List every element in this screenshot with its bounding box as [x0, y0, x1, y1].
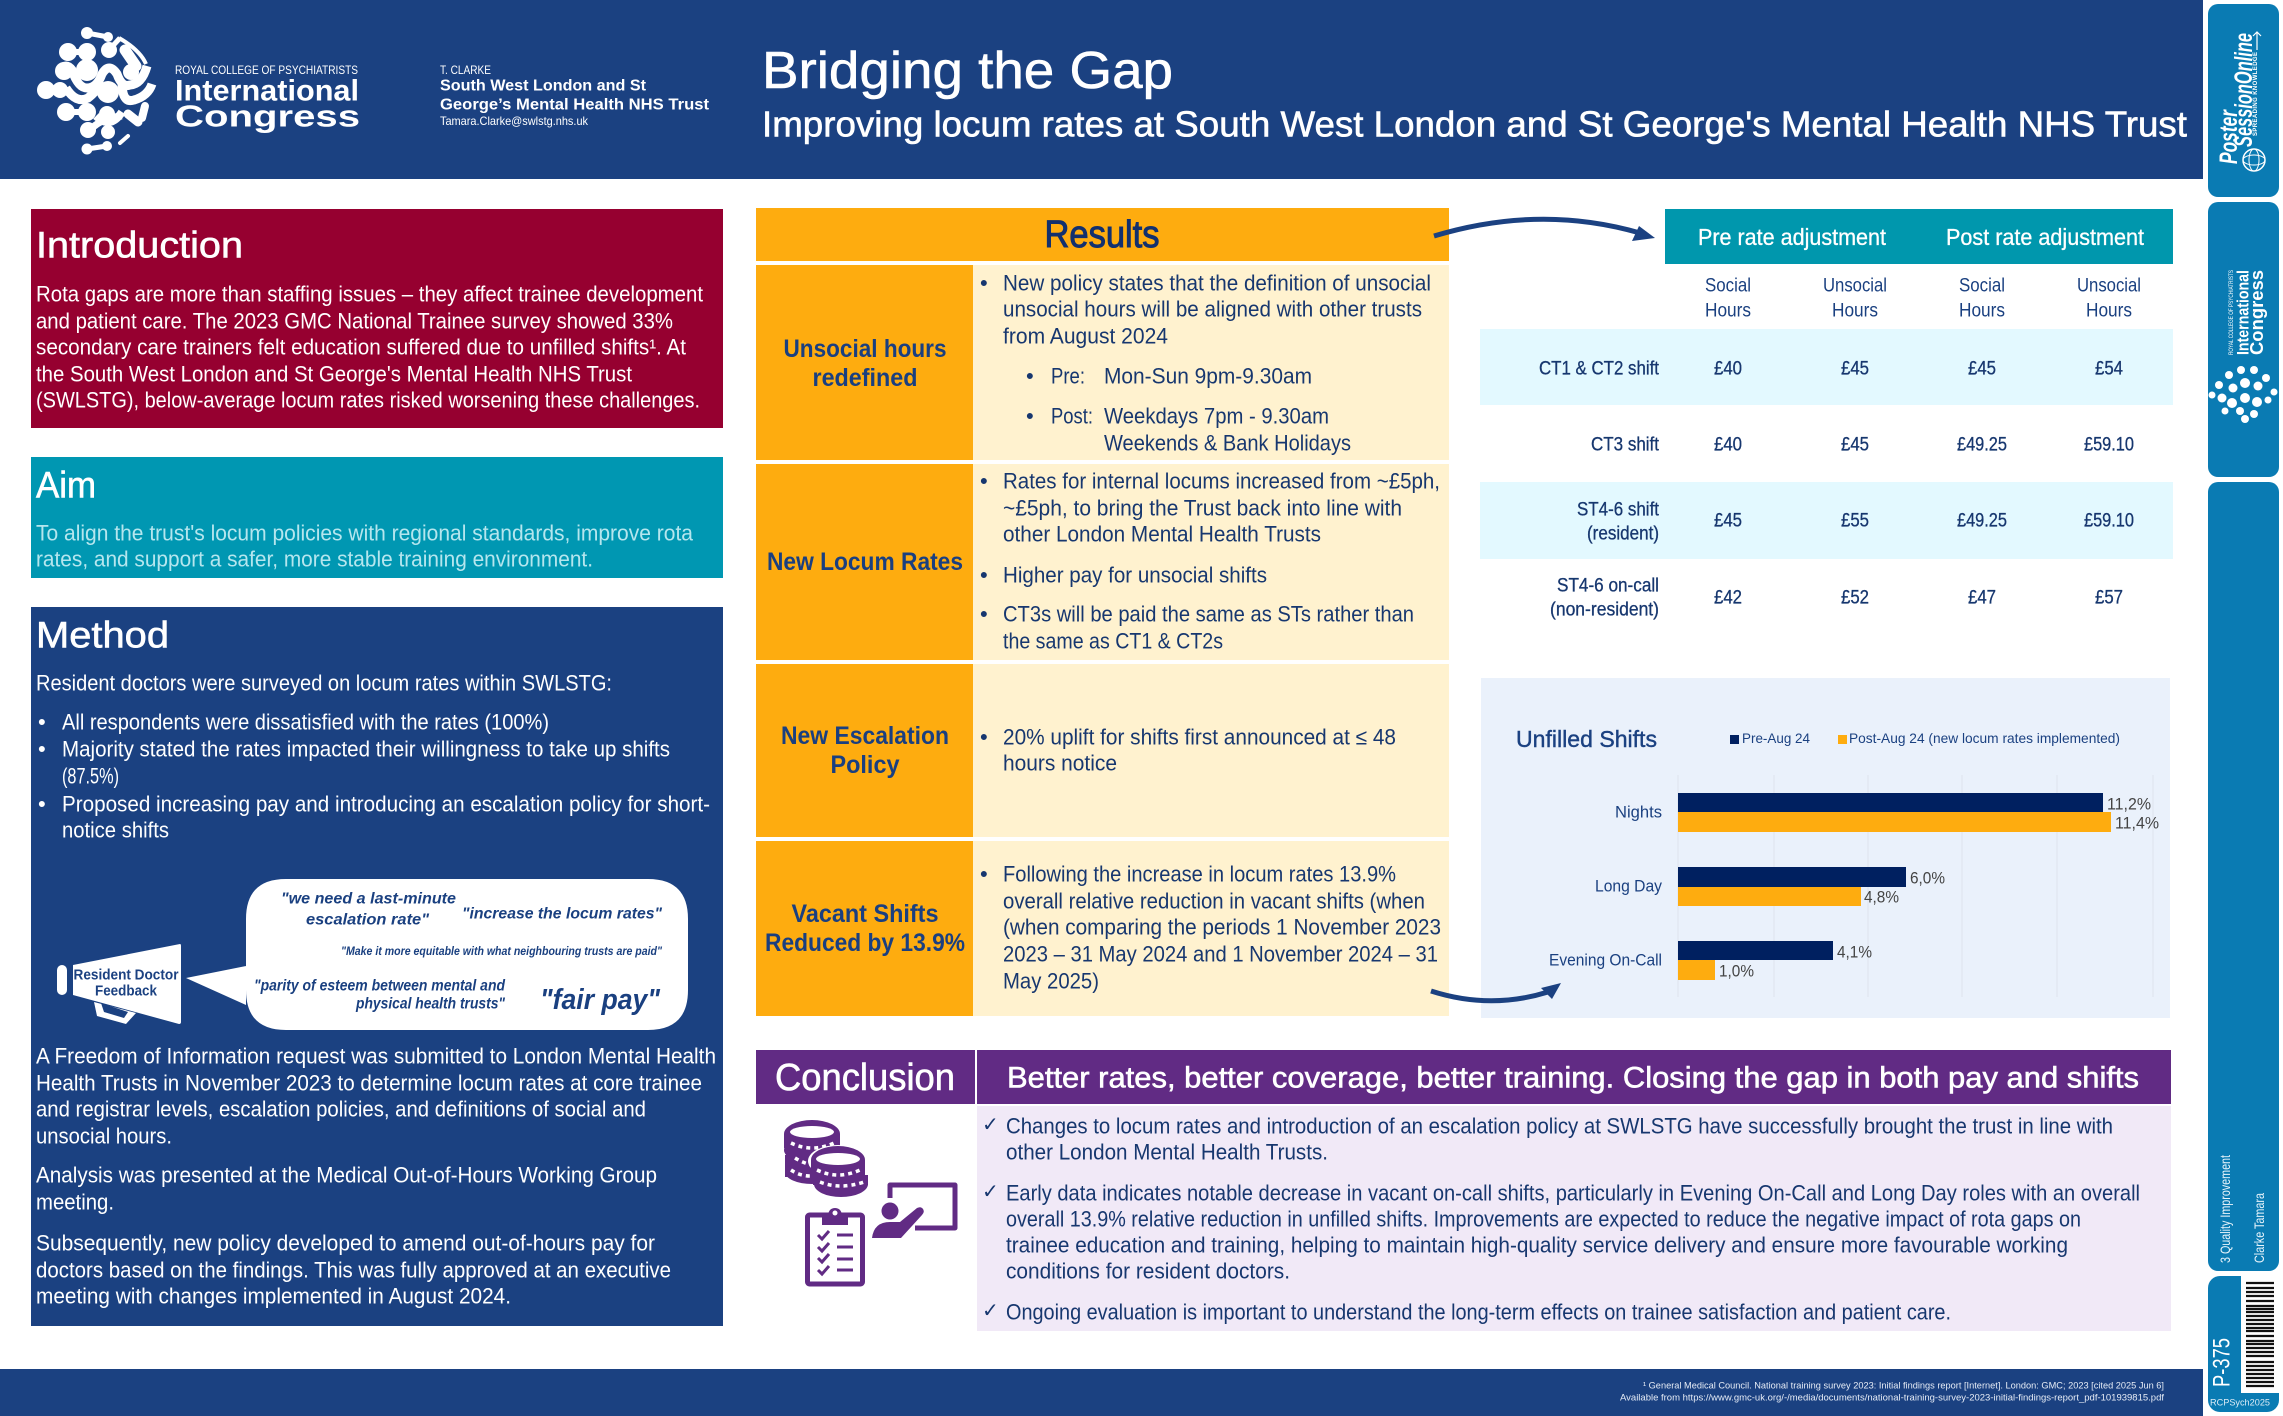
conclusion text block: [977, 1106, 2171, 1331]
speech bubble with quotes: "parity of esteem between mental and: [254, 978, 506, 994]
author block: South West London and St: [440, 78, 647, 94]
row: vacant shifts reduced: 2023 – 31 May 2024 and 1 November 2024 – 31: [1003, 942, 1438, 966]
icon: presenter at board: [872, 1185, 955, 1238]
heading: introduction: Introduction: [36, 224, 243, 266]
row: unsocial hours redefined: unsocial hours will be aligned with other trusts: [1003, 296, 1422, 322]
row: ST4-6 shift: £59.10: [2084, 510, 2134, 532]
column headings: Unsocial: [1823, 276, 1887, 296]
row: CT3: £59.10: [2084, 434, 2134, 456]
author block: George’s Mental Health NHS Trust: [440, 96, 710, 114]
row: ST4-6 shift: £45: [1714, 510, 1742, 532]
method process text: and registrar levels, escalation policies, and definitions of social and: [36, 1096, 646, 1122]
row: new locum rates: Higher pay for unsocial shifts: [1003, 562, 1267, 588]
column headings: Hours: [2086, 300, 2132, 322]
method process text: Health Trusts in November 2023 to determine locum rates at core trainee: [36, 1070, 702, 1096]
row: new escalation policy: Policy: [830, 751, 900, 779]
row: unsocial hours redefined: Unsocial hours: [784, 335, 946, 363]
row: CT3: [1591, 434, 2134, 456]
icon: megaphone with resident doctor feedback: Resident Doctor: [74, 966, 179, 984]
chart legend: Pre-Aug 24: [1742, 730, 1810, 746]
row: vacant shifts reduced: overall relative reduction in vacant shifts (when: [1003, 888, 1425, 914]
row: vacant shifts reduced: Vacant Shifts: [792, 900, 938, 928]
logo wordmark: ROYAL COLLEGE OF PSYCHIATRISTS: [175, 63, 358, 77]
conclusion text block: ✓: [982, 1298, 999, 1322]
row: CT3: £40: [1714, 434, 1742, 456]
method process text: meeting.: [36, 1190, 114, 1214]
logo wordmark: International: [175, 74, 359, 108]
row: CT1 and CT2: CT1 & CT2 shift: [1539, 358, 1660, 380]
sidebar: international congress: ROYAL COLLEGE OF PSYCHIATRISTS: [2229, 270, 2235, 355]
logo wordmark: [175, 63, 360, 134]
aim text: rates, and support a safer, more stable training environment.: [36, 546, 593, 572]
bars: long day: 4,8%: [1864, 888, 1899, 906]
bars: evening on-call: [1549, 941, 1872, 980]
bars: nights: Nights: [1615, 802, 1662, 822]
row: ST4-6 on-call: £42: [1714, 588, 1742, 608]
sidebar: international congress: [2208, 202, 2279, 477]
row: ST4-6 on-call: ST4-6 on-call: [1557, 576, 1659, 596]
row: new locum rates: •: [980, 468, 988, 494]
sidebar: international congress: Congress: [2247, 270, 2267, 355]
arrow: results to table: [1434, 219, 1655, 241]
row: new locum rates: New Locum Rates: [767, 548, 963, 576]
header band: [0, 0, 2203, 179]
row: new locum rates: CT3s will be paid the same as STs rather than: [1003, 602, 1414, 626]
conclusion text block: Changes to locum rates and introduction of an escalation policy at SWLSTG have successfully brought the trust in line with: [1006, 1114, 2113, 1138]
row: ST4-6 on-call: £57: [2095, 588, 2123, 608]
bars: long day: [1595, 867, 1945, 906]
row: unsocial hours redefined: New policy states that the definition of unsocial: [1003, 270, 1431, 296]
row: new escalation policy: •: [980, 724, 988, 750]
row: ST4-6 on-call: £47: [1968, 588, 1996, 608]
survey text: Majority stated the rates impacted their willingness to take up shifts: [62, 736, 670, 762]
conclusion heading: Conclusion: [775, 1057, 955, 1099]
conclusion text block: trainee education and training, helping to maintain high-quality service delivery and ensure more favourable working: [1006, 1232, 2068, 1258]
results heading bar: Results: [1044, 214, 1160, 256]
row: new locum rates: •: [980, 602, 988, 626]
subtitle: Improving locum rates at South West London and St George's Mental Health NHS Trust: [762, 104, 2187, 144]
icon: congress logo: [37, 27, 152, 154]
conclusion text block: other London Mental Health Trusts.: [1006, 1140, 1328, 1164]
row: CT3: £49.25: [1957, 434, 2007, 456]
bars: long day: 6,0%: [1910, 868, 1945, 888]
survey text: •: [38, 736, 46, 762]
row: unsocial hours redefined: •: [1026, 404, 1034, 428]
column headings: [1705, 276, 2141, 322]
conclusion text block: overall 13.9% relative reduction in unfilled shifts. Improvements are expected to reduce the negative impact of rota gaps on: [1006, 1206, 2081, 1232]
icon: coins: [784, 1120, 868, 1197]
bars: evening on-call: 4,1%: [1837, 942, 1872, 962]
introduction text: Rota gaps are more than staffing issues – they affect trainee development: [36, 282, 703, 306]
row: CT3: CT3 shift: [1591, 434, 1660, 456]
chart: unfilled shifts: [1481, 678, 2170, 1018]
row: new locum rates: the same as CT1 & CT2s: [1003, 628, 1223, 654]
sidebar: category and author: Clarke Tamara: [2251, 1193, 2267, 1263]
chart legend: [1730, 730, 2120, 746]
aim text: [36, 520, 694, 572]
row: new escalation policy: 20% uplift for shifts first announced at ≤ 48: [1003, 724, 1396, 750]
row: CT1 and CT2: [1480, 329, 2173, 405]
bars: evening on-call: 1,0%: [1719, 962, 1754, 980]
column headings: Unsocial: [2077, 276, 2141, 296]
row: unsocial hours redefined: redefined: [812, 364, 918, 392]
table: locum rates: [1480, 209, 2173, 620]
introduction text: the South West London and St George's Mental Health NHS Trust: [36, 362, 632, 386]
method process text: Analysis was presented at the Medical Out-of-Hours Working Group: [36, 1162, 657, 1188]
row: unsocial hours redefined: Weekdays 7pm - 9.30am: [1104, 404, 1329, 428]
row: unsocial hours redefined: •: [1026, 364, 1034, 388]
row: unsocial hours redefined: Weekends & Bank Holidays: [1104, 430, 1351, 456]
row: vacant shifts reduced: Following the increase in locum rates 13.9%: [1003, 862, 1396, 886]
row: new locum rates: Rates for internal locums increased from ~£5ph,: [1003, 468, 1440, 494]
method process text: doctors based on the findings. This was fully approved at an executive: [36, 1258, 671, 1282]
row: ST4-6 shift: £49.25: [1957, 510, 2007, 532]
row: CT3: £45: [1841, 434, 1869, 456]
row: CT1 and CT2: £40: [1714, 358, 1742, 380]
introduction text: [36, 282, 703, 412]
row: CT1 and CT2: £54: [2095, 358, 2123, 380]
survey text: •: [38, 710, 46, 734]
row: vacant shifts reduced: May 2025): [1003, 968, 1099, 994]
conclusion text block: conditions for resident doctors.: [1006, 1258, 1290, 1284]
row: vacant shifts reduced: [756, 841, 1449, 1016]
table header: Post rate adjustment: [1946, 224, 2145, 250]
row: vacant shifts reduced: Reduced by 13.9%: [765, 929, 965, 957]
method process text: [36, 1044, 716, 1308]
row: unsocial hours redefined: [756, 265, 1449, 460]
author block: [440, 63, 710, 128]
row: new locum rates: ~£5ph, to bring the Trust back into line with: [1003, 496, 1402, 520]
speech bubble with quotes: escalation rate": [306, 912, 429, 928]
row: unsocial hours redefined: •: [980, 270, 988, 296]
sidebar: poster session online: [2208, 4, 2279, 197]
survey text: Resident doctors were surveyed on locum rates within SWLSTG:: [36, 670, 612, 696]
row: unsocial hours redefined: from August 2024: [1003, 324, 1168, 348]
panel: conclusion: [756, 1050, 2171, 1331]
panel: results: [756, 208, 1449, 1016]
survey text: notice shifts: [62, 818, 169, 842]
method process text: A Freedom of Information request was submitted to London Mental Health: [36, 1044, 716, 1068]
survey text: (87.5%): [62, 764, 119, 788]
row: ST4-6 shift: £55: [1841, 510, 1869, 532]
survey text: All respondents were dissatisfied with the rates (100%): [62, 710, 549, 734]
survey text: Proposed increasing pay and introducing an escalation policy for short-: [62, 792, 710, 816]
row: ST4-6 on-call: £52: [1841, 588, 1869, 608]
conclusion text block: ✓: [982, 1179, 999, 1203]
sidebar: [2208, 4, 2279, 1412]
conclusion heading: [756, 1050, 975, 1104]
conclusion text block: ✓: [982, 1112, 999, 1136]
survey text: •: [38, 792, 46, 816]
arrow: results to chart: [1431, 983, 1561, 1001]
column headings: Social: [1705, 276, 1751, 296]
icon: checklist clipboard: [808, 1208, 862, 1284]
bars: long day: Long Day: [1595, 876, 1662, 896]
method process text: meeting with changes implemented in August 2024.: [36, 1284, 511, 1308]
row: ST4-6 on-call: (non-resident): [1550, 600, 1659, 620]
row: new escalation policy: New Escalation: [781, 722, 949, 750]
conclusion banner: [977, 1050, 2171, 1104]
column headings: Social: [1959, 276, 2005, 296]
panel: aim: [31, 457, 723, 578]
speech bubble with quotes: "we need a last-minute: [281, 890, 456, 908]
method process text: unsocial hours.: [36, 1124, 172, 1148]
row: vacant shifts reduced: (when comparing the periods 1 November 2023: [1003, 914, 1441, 940]
footer reference: Available from https://www.gmc-uk.org/-/media/documents/national-training-survey-2023-initial-findings-report_pdf-101939815.pdf: [1620, 1392, 2164, 1404]
author block: T. CLARKE: [440, 63, 491, 77]
speech bubble with quotes: "fair pay": [540, 984, 661, 1016]
title: Bridging the Gap: [762, 42, 1173, 100]
author block: Tamara.Clarke@swlstg.nhs.uk: [440, 114, 589, 128]
logo wordmark: Congress: [175, 98, 360, 134]
column headings: Hours: [1705, 300, 1751, 322]
bars: nights: 11,2%: [2107, 794, 2151, 814]
introduction text: (SWLSTG), below-average locum rates risked worsening these challenges.: [36, 388, 700, 412]
row: unsocial hours redefined: Post:: [1051, 404, 1093, 428]
table header: [1665, 209, 2173, 264]
row: CT1 and CT2: £45: [1841, 358, 1869, 380]
row: ST4-6 shift: ST4-6 shift: [1577, 500, 1660, 520]
conclusion text block: Early data indicates notable decrease in vacant on-call shifts, particularly in Evening On-Call and Long Day roles with an overall: [1006, 1180, 2140, 1206]
column headings: Hours: [1832, 300, 1878, 322]
row: new locum rates: [756, 464, 1449, 660]
survey text: [36, 670, 710, 842]
footer: [0, 1369, 2203, 1416]
row: unsocial hours redefined: Mon-Sun 9pm-9.30am: [1104, 364, 1312, 388]
row: ST4-6 shift: [1480, 482, 2173, 559]
row: ST4-6 shift: (resident): [1587, 524, 1659, 544]
speech bubble with quotes: [186, 879, 688, 1030]
row: new escalation policy: hours notice: [1003, 750, 1117, 776]
method process text: Subsequently, new policy developed to amend out-of-hours pay for: [36, 1230, 655, 1256]
icon: megaphone with resident doctor feedback: [57, 944, 181, 1024]
sidebar: poster id and barcode: P-375: [2208, 1338, 2236, 1387]
footer reference: [1620, 1380, 2164, 1404]
chart title: Unfilled Shifts: [1516, 726, 1657, 752]
panel: method: [31, 607, 723, 1326]
heading: method: Method: [36, 614, 169, 656]
table header: Pre rate adjustment: [1698, 224, 1887, 250]
sidebar: poster session online: Poster: [2215, 109, 2243, 164]
introduction text: and patient care. The 2023 GMC National Trainee survey showed 33%: [36, 308, 673, 334]
sidebar: poster id and barcode: RCPSych2025: [2210, 1398, 2270, 1408]
speech bubble with quotes: "increase the locum rates": [462, 906, 662, 922]
introduction text: secondary care trainers felt education suffered due to unfilled shifts¹. At: [36, 334, 686, 360]
speech bubble with quotes: "Make it more equitable with what neighbouring trusts are paid": [341, 946, 663, 958]
icon: megaphone with resident doctor feedback: Feedback: [95, 982, 158, 1000]
row: unsocial hours redefined: Pre:: [1051, 364, 1085, 388]
speech bubble with quotes: physical health trusts": [355, 996, 505, 1012]
bars: nights: 11,4%: [2115, 814, 2159, 832]
row: vacant shifts reduced: •: [980, 862, 988, 886]
row: new locum rates: other London Mental Health Trusts: [1003, 522, 1321, 546]
sidebar: category and author: [2208, 482, 2279, 1271]
sidebar: international congress: International: [2234, 270, 2252, 355]
bars: evening on-call: Evening On-Call: [1549, 950, 1662, 970]
sidebar: poster session online: SPREADING KNOWLEDGE: [2253, 52, 2259, 136]
row: new escalation policy: [756, 664, 1449, 837]
sidebar: poster id and barcode: [2208, 1276, 2279, 1412]
conclusion banner: Better rates, better coverage, better training. Closing the gap in both pay and shifts: [1007, 1062, 2139, 1094]
row: ST4-6 on-call: [1550, 576, 2123, 620]
row: new locum rates: •: [980, 562, 988, 588]
results heading bar: [756, 208, 1449, 261]
heading: aim: Aim: [36, 464, 96, 506]
aim text: To align the trust's locum policies with regional standards, improve rota: [36, 520, 694, 546]
panel: introduction: [31, 209, 723, 428]
row: CT1 and CT2: £45: [1968, 358, 1996, 380]
footer reference: ¹ General Medical Council. National training survey 2023: Initial findings report [Internet]. London: GMC; 2023 [cited 2025 Jun 6]: [1643, 1380, 2164, 1392]
conclusion text block: Ongoing evaluation is important to understand the long-term effects on trainee satisfaction and patient care.: [1006, 1300, 1951, 1324]
sidebar: category and author: 3 Quality Improvement: [2217, 1155, 2233, 1263]
chart legend: Post-Aug 24 (new locum rates implemented): [1849, 730, 2120, 746]
bars: nights: [1615, 793, 2159, 832]
column headings: Hours: [1959, 300, 2005, 322]
